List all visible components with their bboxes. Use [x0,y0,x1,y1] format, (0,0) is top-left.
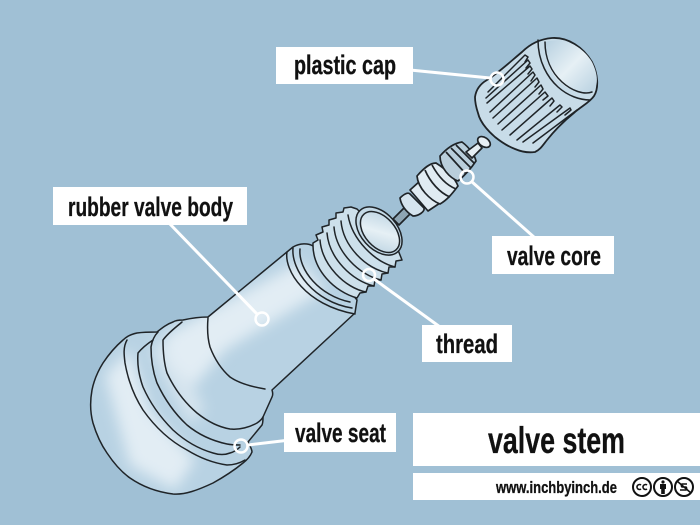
label: plastic cap [276,47,504,86]
illustration: plastic cap [475,38,597,152]
icon: cc licence [633,478,693,496]
label: rubber valve body: rubber valve body [68,192,233,222]
thread [313,207,402,298]
label: valve core: valve core [507,241,601,271]
neck and bulb [91,244,357,494]
label: thread: thread [436,329,498,359]
title [413,413,700,466]
website: www.inchbyinch.de [495,479,617,497]
label: thread [363,269,512,362]
illustration: valve core [393,134,492,225]
credit bar [413,473,700,500]
shoulder curve [208,318,265,389]
thread mouth [347,198,411,264]
label: plastic cap: plastic cap [294,50,396,80]
label: valve seat: valve seat [295,418,386,448]
label: rubber valve body [53,187,268,326]
title: valve stem [488,420,625,461]
body shading [105,262,325,490]
label: valve core [460,170,614,274]
seat rings [124,340,245,465]
collar rings [287,248,355,314]
illustration: rubber valve body [91,198,411,494]
label: valve seat [234,413,396,452]
